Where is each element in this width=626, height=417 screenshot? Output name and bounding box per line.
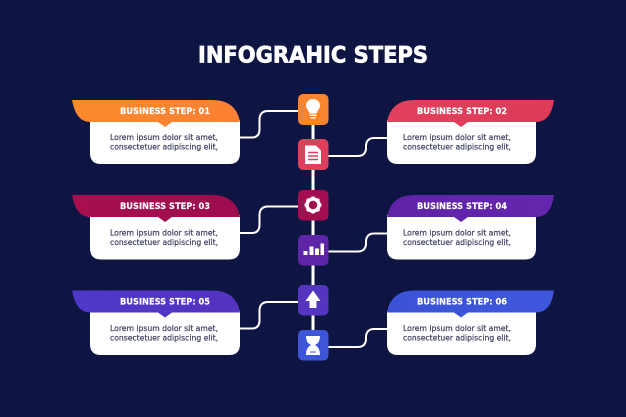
- connector: step 03: [240, 206, 298, 233]
- header ribbon: [387, 100, 554, 127]
- connector: step 02: [328, 138, 387, 156]
- icon: up arrow: [298, 285, 328, 316]
- central vertical connector line: [312, 110, 314, 345]
- panel: step 04: [387, 195, 554, 260]
- body text: Lorem ipsum dolor sit amet,: [403, 228, 511, 238]
- body text: consectetuer adipiscing elit,: [403, 142, 511, 152]
- header ribbon: [72, 290, 240, 318]
- heading: BUSINESS STEP: 03: [120, 202, 210, 212]
- body text: Lorem ipsum dolor sit amet,: [403, 324, 511, 333]
- panel: step 03: [72, 195, 240, 260]
- title: INFOGRAHIC STEPS: [198, 44, 428, 68]
- heading: BUSINESS STEP: 01: [120, 107, 210, 117]
- icon: document: [298, 139, 328, 170]
- card body: [387, 120, 536, 164]
- body text: consectetuer adipiscing elit,: [110, 238, 218, 247]
- card body: [90, 215, 240, 260]
- connector: step 06: [328, 329, 387, 347]
- panel: step 02: [387, 100, 554, 164]
- heading: BUSINESS STEP: 06: [417, 298, 507, 308]
- heading: BUSINESS STEP: 04: [417, 202, 507, 212]
- connector: step 01: [240, 111, 298, 138]
- icon: bar chart: [298, 235, 328, 266]
- body text: Lorem ipsum dolor sit amet,: [403, 133, 511, 142]
- connector: step 05: [240, 302, 298, 328]
- card body: [90, 311, 240, 355]
- icon: light bulb: [298, 94, 328, 125]
- header ribbon: [72, 195, 240, 222]
- body text: consectetuer adipiscing elit,: [403, 238, 511, 247]
- card body: [387, 311, 536, 355]
- header ribbon: [387, 195, 554, 222]
- panel: step 01: [72, 100, 240, 164]
- header ribbon: [387, 290, 554, 318]
- body text: Lorem ipsum dolor sit amet,: [110, 324, 218, 333]
- header ribbon: [72, 100, 240, 127]
- body text: [403, 133, 511, 152]
- panel: step 06: [387, 290, 554, 355]
- body text: [110, 133, 218, 152]
- body text: consectetuer adipiscing elit,: [110, 334, 218, 342]
- body text: [403, 228, 511, 247]
- heading: BUSINESS STEP: 05: [120, 298, 210, 308]
- heading: BUSINESS STEP: 02: [417, 107, 507, 117]
- body text: Lorem ipsum dolor sit amet,: [110, 133, 218, 142]
- body text: Lorem ipsum dolor sit amet,: [110, 228, 218, 238]
- body text: [110, 324, 218, 342]
- panel: step 05: [72, 290, 240, 355]
- icon: gear: [298, 190, 328, 220]
- icon: hourglass: [298, 330, 328, 360]
- body text: [110, 228, 218, 247]
- connector: step 04: [328, 234, 387, 252]
- body text: consectetuer adipiscing elit,: [110, 142, 218, 152]
- body text: consectetuer adipiscing elit,: [403, 334, 511, 342]
- card body: [90, 120, 240, 164]
- card body: [387, 215, 536, 260]
- body text: [403, 324, 511, 342]
